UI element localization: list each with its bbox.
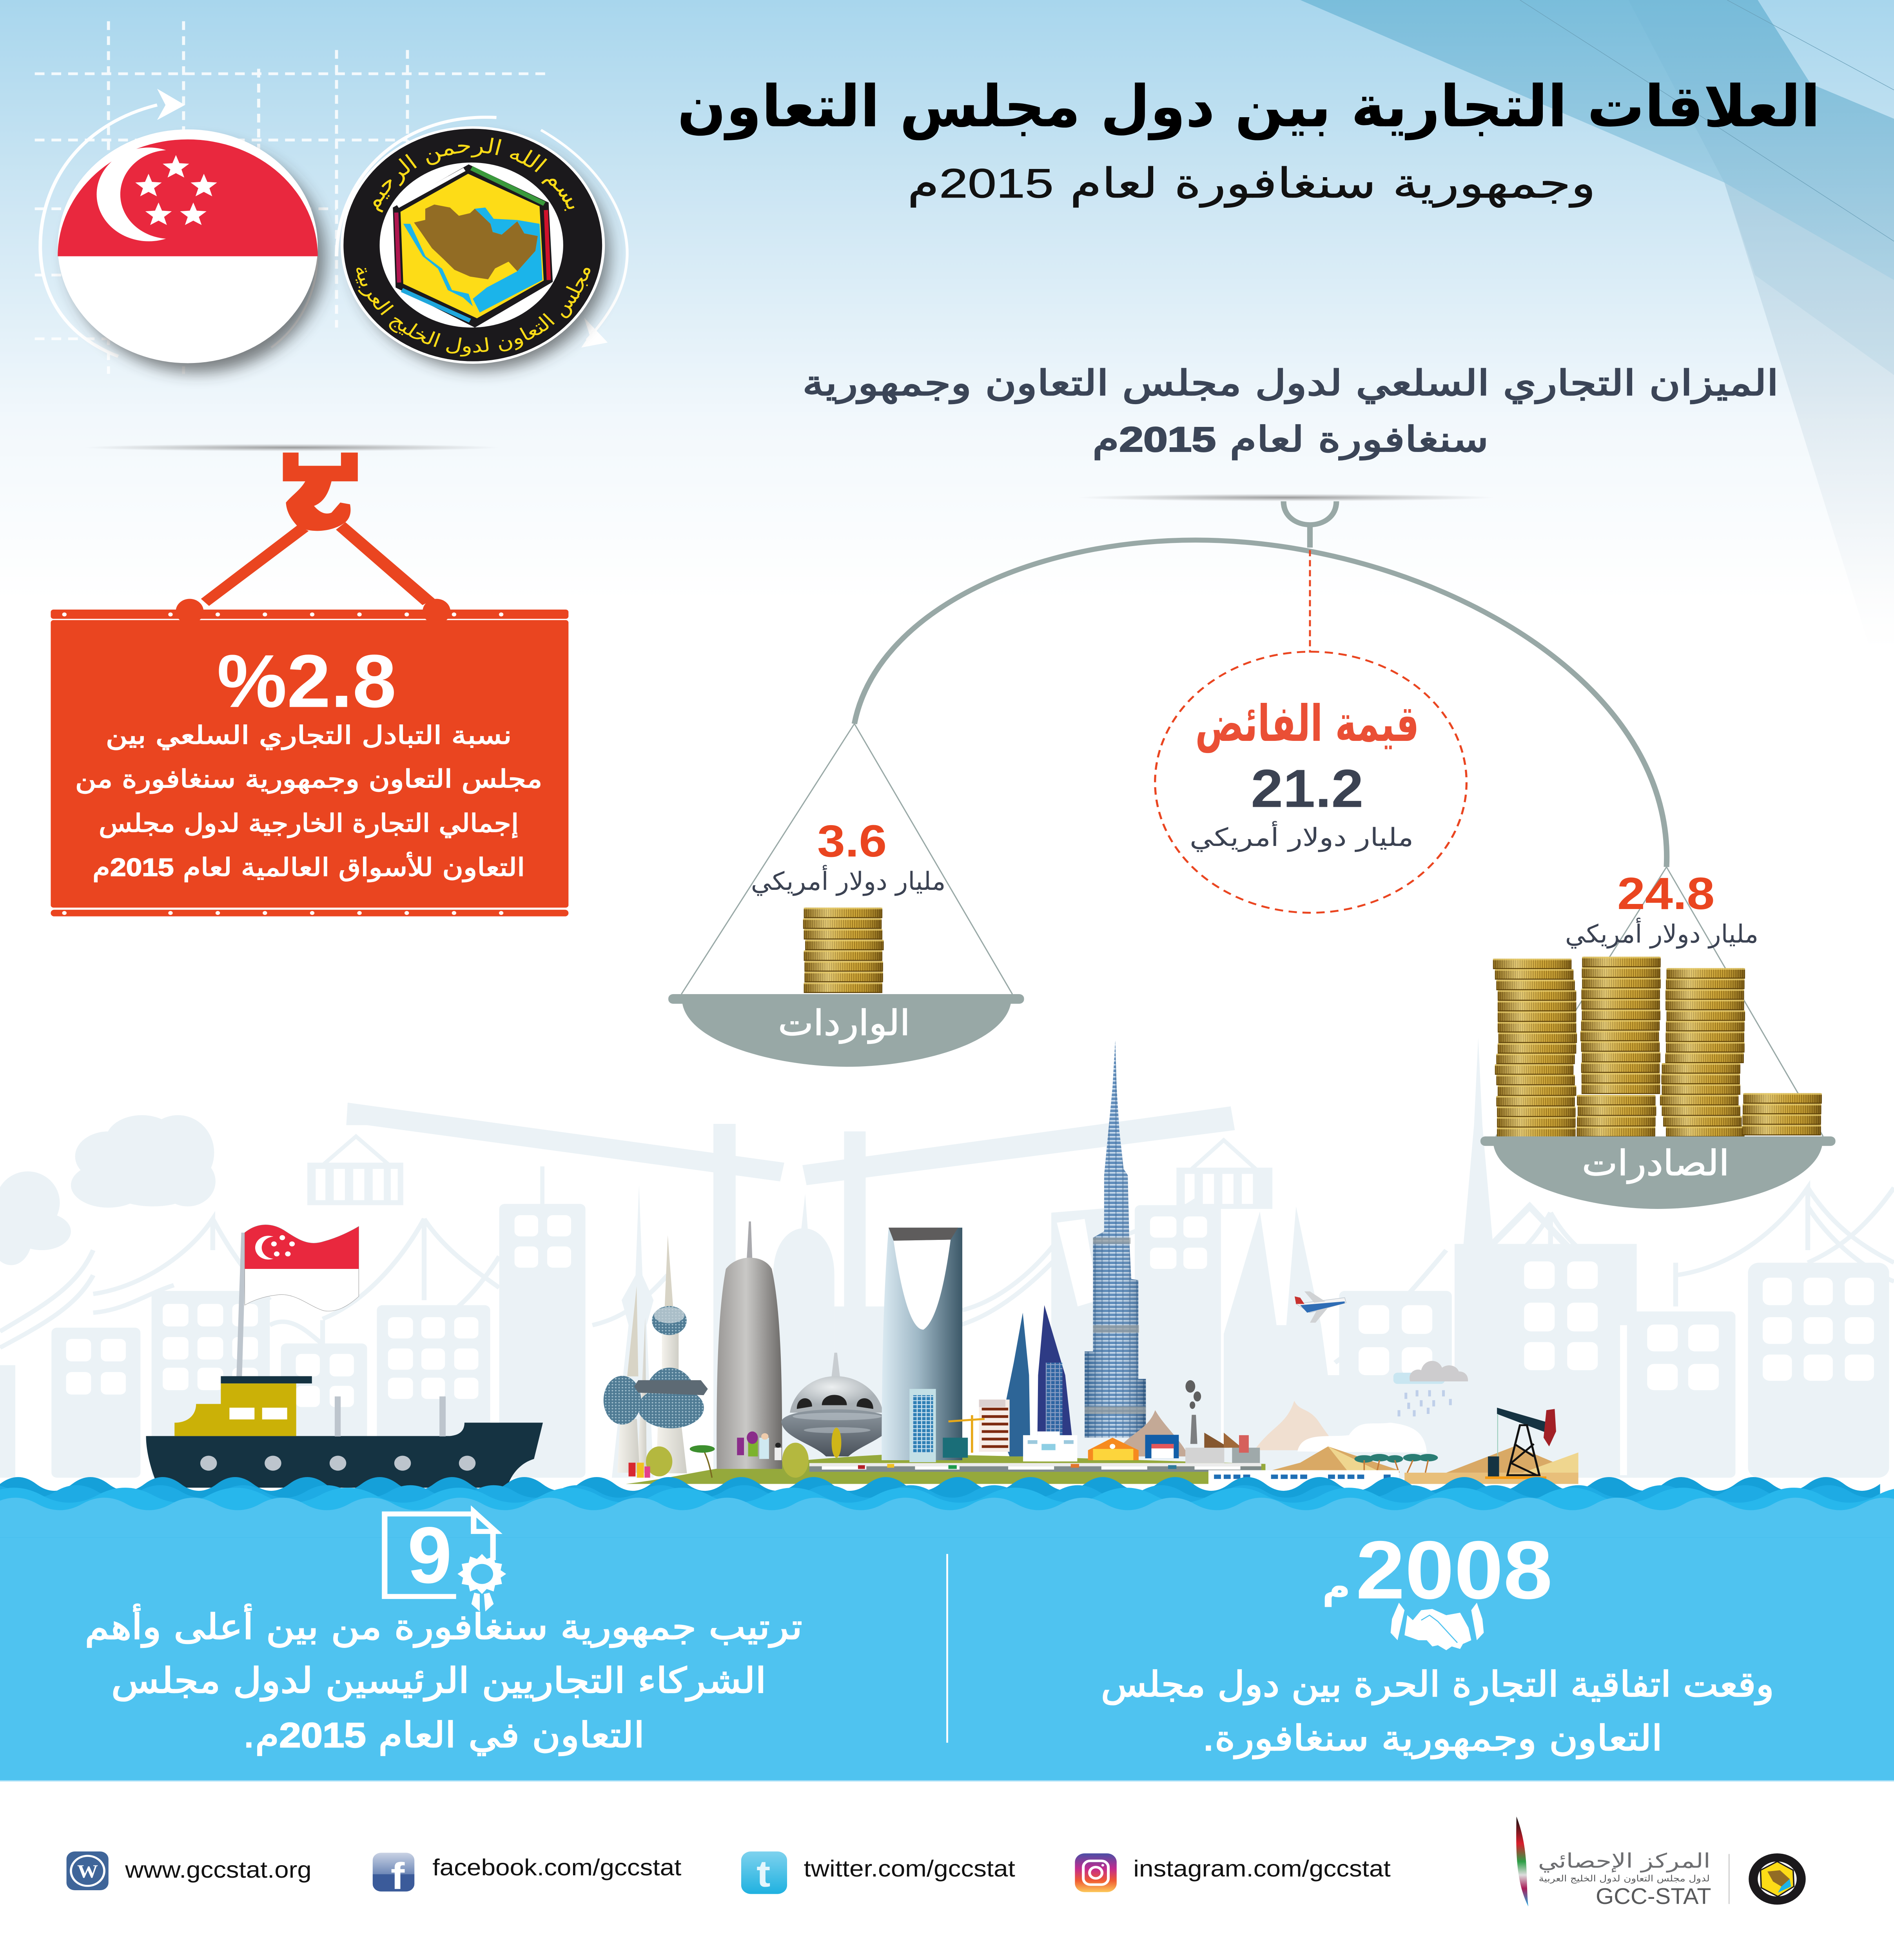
imports pan: الواردات xyxy=(778,1003,910,1044)
divider xyxy=(946,1554,948,1743)
footer social links: facebook.com/gccstat xyxy=(432,1855,681,1880)
ratio description: مجلس التعاون وجمهورية سنغافورة من xyxy=(75,764,542,794)
ratio description: التعاون للأسواق العالمية لعام 2015م xyxy=(93,852,525,882)
power lines xyxy=(0,1188,1894,1363)
panel: rank ninth xyxy=(85,1510,802,1756)
burj khalifa xyxy=(1085,1040,1146,1438)
buildings right xyxy=(1135,1205,1221,1478)
icon: handshake xyxy=(1391,1603,1484,1650)
background skyline silhouettes xyxy=(0,1038,1894,1479)
imports pan: 3.6 xyxy=(817,816,887,866)
icon: website xyxy=(67,1851,109,1890)
logos group: flags xyxy=(40,89,627,372)
decorative angled panels top right xyxy=(1300,0,1894,650)
footer gcc-stat logo: لدول مجلس التعاون لدول الخليج العربية xyxy=(1539,1873,1710,1884)
icon: twitter: t xyxy=(757,1853,770,1895)
icon: singapore flag circle xyxy=(58,129,325,372)
ratio description: نسبة التبادل التجاري السلعي بين xyxy=(106,720,512,750)
clouds xyxy=(106,1115,178,1165)
icon: rank document with medal: 9 xyxy=(407,1510,452,1600)
panel: rank ninth: التعاون في العام 2015م. xyxy=(243,1715,644,1756)
panel: free trade agreement: م xyxy=(1322,1566,1351,1607)
crane containers xyxy=(307,1136,1272,1209)
arc ring around singapore flag xyxy=(40,89,317,356)
people and trees xyxy=(629,1428,841,1478)
panel: crane hook xyxy=(176,452,450,624)
panel: free trade agreement: التعاون وجمهورية سنغافورة. xyxy=(1202,1718,1662,1759)
icon: cloud with rain xyxy=(1393,1361,1468,1416)
big percent: %2.8 xyxy=(217,639,396,723)
exports pan: 24.8 xyxy=(1617,868,1714,918)
arc rings around gcc emblem xyxy=(337,117,627,348)
portholes xyxy=(200,1455,475,1471)
sea panel xyxy=(0,1477,1894,1781)
panel: free trade agreement: وقعت اتفاقية التجارة الحرة بين دول مجلس xyxy=(1101,1664,1774,1705)
surplus callout: قيمة الفائض xyxy=(1195,695,1419,753)
emblem bottom ring text: مجلس التعاون لدول الخليج العربية xyxy=(350,263,596,357)
icon: waving flag xyxy=(245,1225,359,1311)
panel: rank ninth: الشركاء التجاريين الرئيسين لدول مجلس xyxy=(111,1661,766,1701)
road xyxy=(809,1463,1261,1472)
footer social links xyxy=(67,1851,1391,1897)
icon: twitter xyxy=(741,1851,787,1895)
ratio description xyxy=(75,720,542,882)
trade balance heading: سنغافورة لعام 2015م xyxy=(1092,419,1489,460)
buildings left xyxy=(0,1365,15,1478)
icon: ship with flag xyxy=(146,1225,543,1488)
panel: free trade agreement xyxy=(1101,1524,1774,1759)
surplus callout: مليار دولار أمريكي xyxy=(1190,821,1413,852)
trade balance heading: الميزان التجاري السلعي لدول مجلس التعاون وجمهورية xyxy=(802,363,1779,404)
landmarks skyline xyxy=(604,1040,1578,1484)
icon: facebook xyxy=(373,1853,414,1897)
ghost towers xyxy=(612,1185,653,1478)
ground hill xyxy=(626,1454,1265,1484)
palm trees xyxy=(1354,1454,1438,1473)
flag pole xyxy=(236,1233,246,1377)
panel: rank ninth: ترتيب جمهورية سنغافورة من بين أعلى وأهم xyxy=(85,1604,802,1648)
kingdom centre tower xyxy=(882,1228,962,1462)
footer gcc-stat logo: المركز الإحصائي xyxy=(1538,1849,1711,1873)
panel: free trade agreement: 2008 xyxy=(1356,1524,1553,1616)
kuwait main tower xyxy=(634,1235,708,1473)
superstructure xyxy=(174,1383,296,1436)
train xyxy=(1208,1470,1399,1484)
waves xyxy=(0,1477,1880,1538)
coins stacks exports xyxy=(1493,957,1822,1138)
ghost kingdom tower xyxy=(1051,1207,1129,1478)
hospital school market factory xyxy=(1023,1380,1260,1463)
surplus callout: 21.2 xyxy=(1251,759,1364,818)
footer social links: instagram.com/gccstat xyxy=(1133,1856,1391,1882)
ratio description: إجمالي التجارة الخارجية لدول مجلس xyxy=(99,809,519,838)
icon: facebook: f xyxy=(391,1855,405,1897)
trade balance heading xyxy=(802,363,1779,460)
ghost burj xyxy=(1463,1038,1493,1478)
mountains xyxy=(1112,1401,1427,1456)
icon: instagram xyxy=(1075,1853,1117,1892)
icon: airplane xyxy=(1295,1291,1346,1323)
ghost windows xyxy=(66,1215,1874,1478)
doha tower xyxy=(717,1221,782,1469)
imports pan xyxy=(668,724,1024,1067)
exports pan: مليار دولار أمريكي xyxy=(1565,917,1758,949)
footer gcc-stat logo: GCC-STAT xyxy=(1596,1884,1711,1909)
ghost bahrain sails xyxy=(1224,1207,1342,1478)
footer social links: www.gccstat.org xyxy=(125,1857,312,1883)
icon: oil pump xyxy=(1485,1408,1556,1479)
icon: small gcc emblem xyxy=(1749,1853,1806,1905)
coins stack imports xyxy=(803,907,884,993)
footer gcc-stat logo xyxy=(1516,1817,1806,1909)
desert dunes xyxy=(1263,1446,1578,1484)
dashed white grid top left xyxy=(35,21,545,374)
scale beam and hook xyxy=(854,501,1667,867)
footer social links: twitter.com/gccstat xyxy=(804,1856,1015,1882)
subtitle: وجمهورية سنغافورة لعام 2015م xyxy=(907,160,1596,208)
imports pan: مليار دولار أمريكي xyxy=(751,865,945,896)
kuwait small tower xyxy=(604,1286,647,1473)
exports pan: الصادرات xyxy=(1582,1143,1729,1184)
domed tower xyxy=(781,1353,893,1456)
panel: trade ratio box xyxy=(51,610,568,916)
bahrain wtc sails xyxy=(1000,1305,1072,1456)
sky gradient xyxy=(0,0,1894,600)
cranes xyxy=(346,1103,784,1181)
hull xyxy=(146,1423,543,1488)
red striped building and crane xyxy=(943,1399,1010,1458)
exports pan xyxy=(1480,867,1836,1209)
icon: website: W xyxy=(77,1861,98,1882)
emblem top ring text: بسم الله الرحمن الرحيم xyxy=(357,132,589,214)
icon: rank document with medal xyxy=(385,1510,506,1612)
icon: gcc emblem xyxy=(341,126,609,370)
surplus callout xyxy=(1155,652,1466,913)
